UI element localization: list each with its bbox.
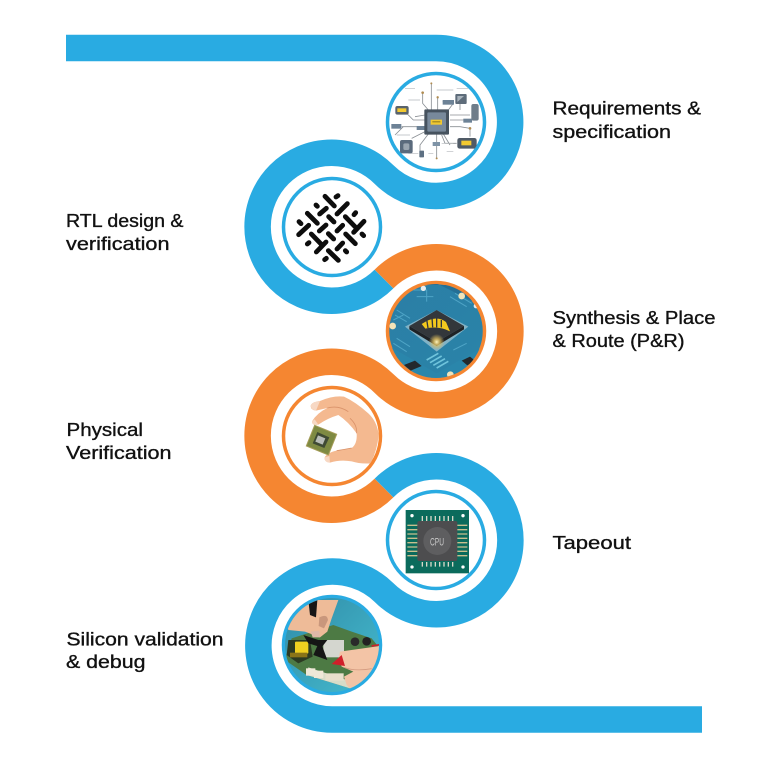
ribbon: blue bottom section <box>258 466 702 720</box>
label: Synthesis & Place & Route (P&R): Synthesis & Place <box>552 307 716 328</box>
icon: hands testing a circuit board <box>280 596 380 697</box>
label: Physical Verification: Verification <box>66 442 172 463</box>
label: Synthesis & Place & Route (P&R): & Route (P&R) <box>552 330 684 351</box>
label: Requirements & specification: specification <box>552 121 671 142</box>
label: Silicon validation & debug <box>66 629 224 672</box>
label: RTL design & verification: verification <box>66 233 170 254</box>
label: Physical Verification <box>66 419 172 463</box>
icon: hand holding a chip <box>284 388 380 484</box>
label: Requirements & specification: Requirements & <box>552 98 702 119</box>
ribbon: blue top section <box>66 48 510 301</box>
label: Silicon validation & debug: & debug <box>66 651 146 672</box>
label: Tapeout: Tapeout <box>552 532 631 553</box>
label: Synthesis & Place & Route (P&R) <box>552 307 716 351</box>
label: RTL design & verification: RTL design & <box>66 210 184 231</box>
icon: green CPU chip <box>388 492 484 588</box>
label: Physical Verification: Physical <box>66 419 143 440</box>
icon: green CPU chip: CPU <box>430 537 444 549</box>
label: Silicon validation & debug: Silicon validation <box>66 629 224 650</box>
label: RTL design & verification <box>66 210 184 254</box>
ribbon: orange middle section <box>258 257 510 510</box>
icon: processor on blue circuit board <box>388 282 484 380</box>
label: Requirements & specification <box>552 98 702 142</box>
icon: circuit board diagram <box>388 74 484 170</box>
icon: black woven lattice <box>284 178 380 276</box>
